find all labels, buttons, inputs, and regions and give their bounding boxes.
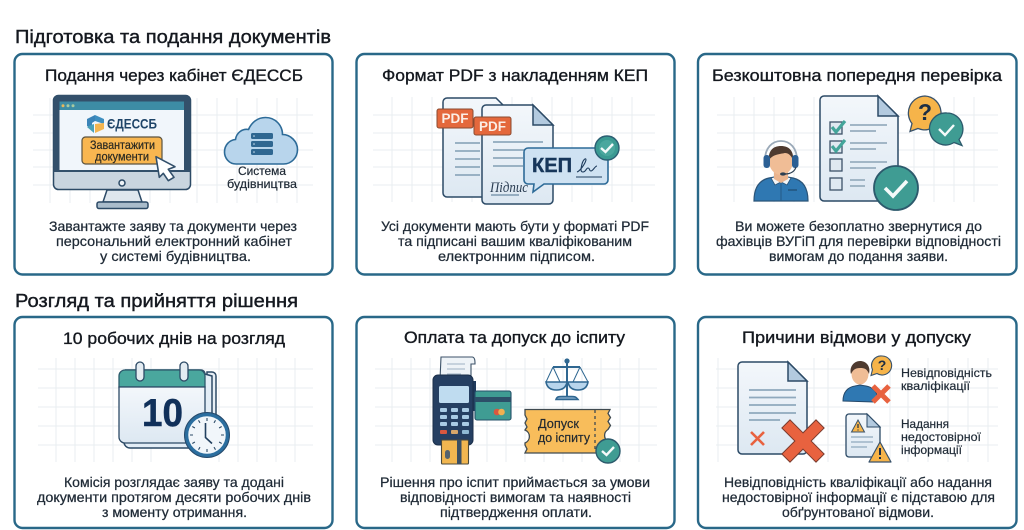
card title: Формат PDF з накладенням КЕП	[382, 66, 648, 85]
description: з моменту отримання.	[102, 505, 247, 520]
description: документи протягом десяти робочих днів	[37, 490, 311, 505]
upload button: Завантажити	[90, 140, 155, 152]
label: unreliable information: Надання	[901, 417, 949, 431]
icon: check bubble	[930, 113, 963, 146]
panel: ten working days review	[14, 317, 332, 528]
PDF tag: PDF	[479, 119, 506, 134]
icon: large red cross	[790, 428, 816, 454]
description: Невідповідність кваліфікації або надання	[724, 475, 992, 490]
upload button	[82, 137, 162, 164]
description: Усі документи мають бути у форматі PDF	[381, 219, 649, 234]
cloud label: будівництва	[227, 177, 297, 191]
panel: payment and exam admission	[356, 317, 674, 528]
heading: preparation and submission: Підготовка та подання документів	[15, 26, 331, 47]
description	[49, 219, 297, 264]
icon: scales	[546, 359, 588, 400]
icon: question bubble: ?	[918, 99, 932, 125]
logo cube	[87, 115, 104, 133]
icon: payment terminal	[433, 357, 476, 445]
signature label: Підпис	[489, 180, 528, 196]
heading: review and decision: Розгляд та прийняття рішення	[15, 290, 298, 311]
icon: yellow card	[442, 440, 468, 464]
description: обґрунтованої відмови.	[782, 505, 934, 520]
icon: KEP signature bubble: КЕП	[532, 155, 572, 177]
label: qualification mismatch: Невідповідність	[901, 366, 992, 380]
label: unreliable information: інформації	[901, 443, 963, 457]
icon: question bubble	[908, 96, 941, 132]
icon: person with question and cross	[843, 356, 892, 402]
icon: cursor	[156, 157, 175, 181]
description: у системі будівництва.	[100, 249, 251, 264]
icon: large check badge	[874, 166, 918, 210]
description	[380, 475, 650, 520]
panel: reasons for refusal	[698, 317, 1016, 528]
icon: person with question and cross: ?	[878, 357, 886, 373]
icon: green bank card	[475, 391, 511, 420]
card title: Подання через кабінет ЄДЕССБ	[45, 66, 303, 85]
icon: admission ticket: Допуск	[538, 416, 579, 431]
label: qualification mismatch: кваліфікації	[901, 379, 971, 393]
description	[716, 219, 1001, 264]
panel: PDF format with qualified signature	[356, 54, 674, 274]
icon: desktop monitor with upload button	[54, 95, 190, 208]
description: недостовірної інформації є підставою для	[722, 490, 995, 505]
icon: calendar	[119, 362, 216, 448]
description: вимогам до подання заяви.	[769, 249, 948, 264]
card title: Оплата та допуск до іспиту	[404, 328, 626, 347]
icon: rejected document	[738, 362, 807, 454]
description	[37, 475, 311, 520]
label: unreliable information: недостовірної	[901, 430, 982, 444]
description: фахівців ВУГіП для перевірки відповідності	[716, 234, 1001, 249]
description: Ви можете безоплатно звернутися до	[735, 219, 982, 234]
icon: admission ticket: до іспиту	[538, 430, 590, 445]
description: Завантажте заяву та документи через	[49, 219, 297, 234]
icon: calendar: 10	[142, 392, 183, 435]
icon: two PDF documents	[437, 98, 553, 204]
cloud label	[227, 164, 297, 191]
icon: document with warnings	[846, 414, 891, 462]
description: відповідності вимогам та наявності	[400, 490, 631, 505]
icon: support operator with headset	[754, 141, 808, 201]
card title: 10 робочих днів на розгляд	[63, 329, 285, 348]
cloud label: Система	[238, 164, 286, 178]
description: Рішення про іспит приймається за умови	[380, 475, 650, 490]
description	[381, 219, 649, 264]
icon: cloud with server	[224, 118, 298, 164]
icon: admission ticket	[525, 410, 620, 463]
icon: checklist document	[820, 96, 898, 201]
card title: Причини відмови у допуску	[742, 328, 972, 347]
description: Комісія розглядає заяву та додані	[64, 475, 284, 490]
panel: submission via cabinet	[14, 54, 332, 274]
icon: clock	[184, 412, 230, 458]
label: qualification mismatch	[901, 366, 992, 393]
label: unreliable information	[901, 417, 982, 457]
description: підтвердження оплати.	[440, 505, 592, 520]
PDF tag: PDF	[442, 111, 468, 126]
logo text: ЄДЕССБ	[107, 116, 157, 132]
description: та підписані вашим кваліфікованим	[398, 234, 632, 249]
description: електронним підписом.	[438, 249, 595, 264]
upload button: документи	[95, 152, 149, 164]
card title: Безкоштовна попередня перевірка	[712, 66, 1003, 85]
description: персональний електронний кабінет	[56, 234, 293, 249]
description	[722, 475, 995, 520]
icon: KEP signature bubble	[524, 136, 619, 192]
panel: free preliminary check	[698, 54, 1016, 274]
